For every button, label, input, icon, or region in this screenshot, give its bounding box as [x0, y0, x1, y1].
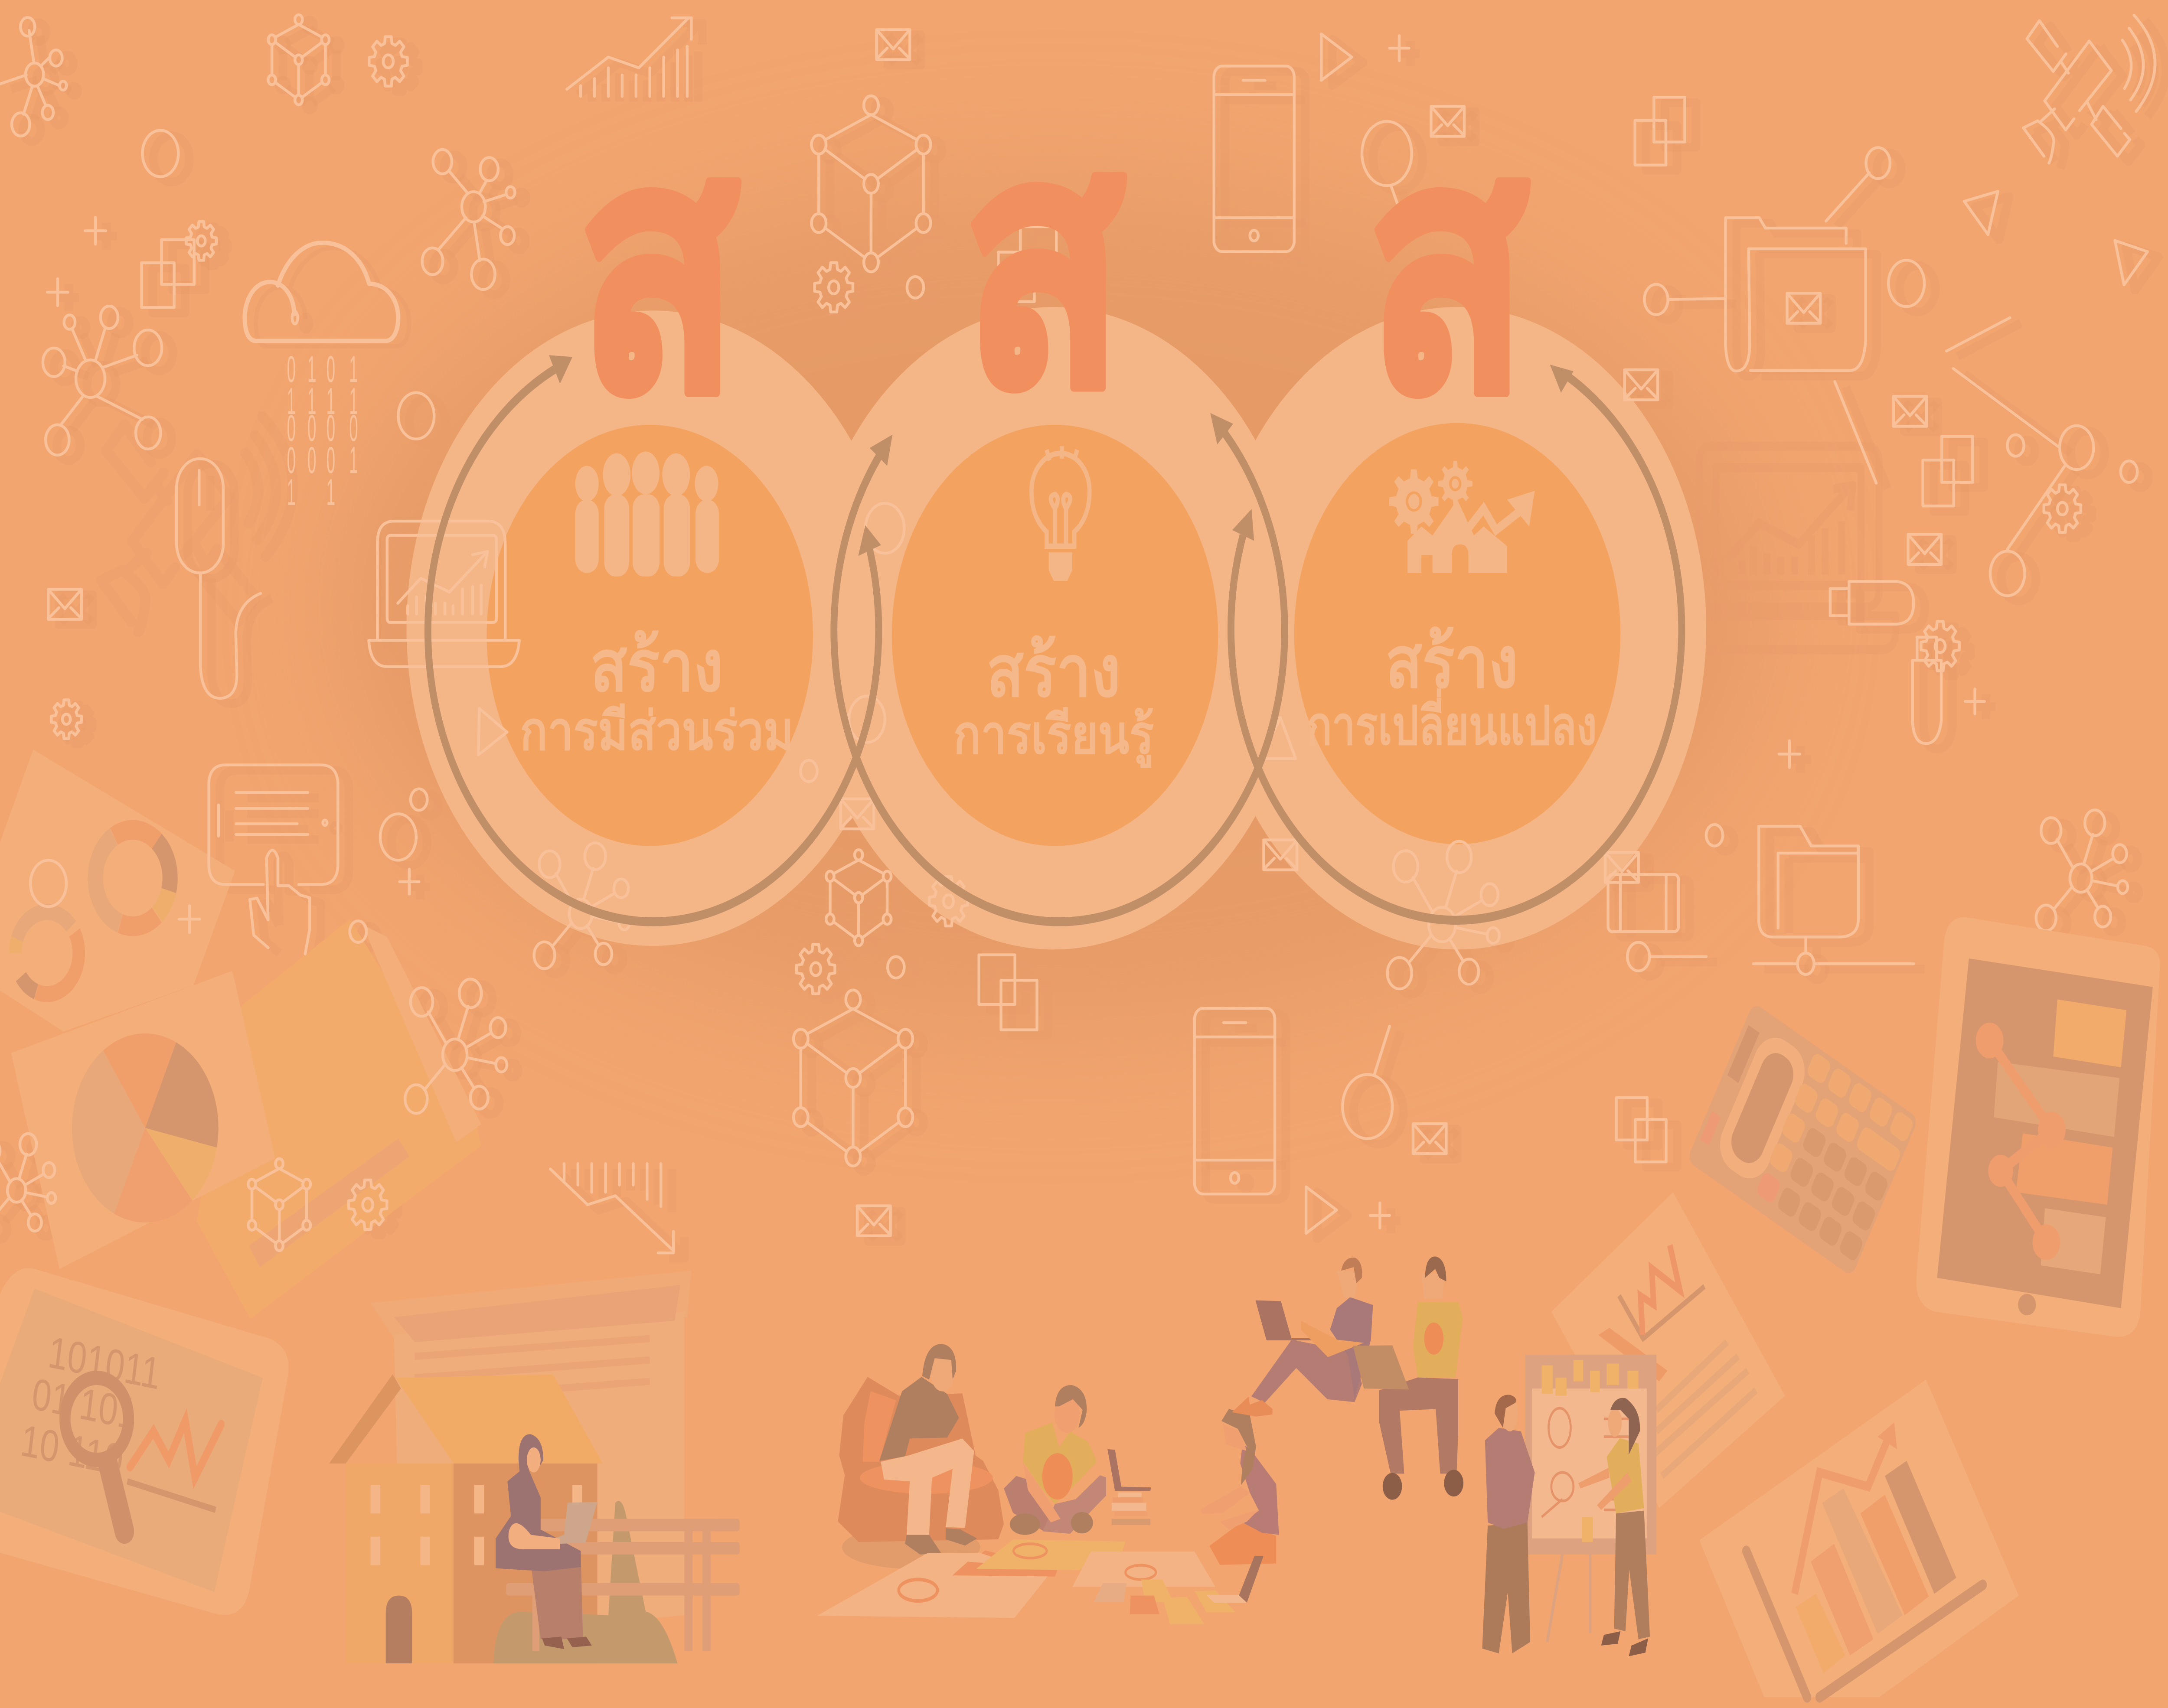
icon: circle left [865, 503, 904, 553]
icon: light bulb [1032, 446, 1090, 578]
trend line [130, 1421, 221, 1478]
icon: envelope [841, 799, 874, 829]
icon: gear [1921, 621, 1959, 671]
disc: middle [892, 425, 1218, 846]
illustration: woman at board [1578, 1398, 1650, 1656]
laptop base [1207, 1595, 1247, 1603]
arrowhead [870, 434, 892, 466]
panel: donut chart paper [0, 750, 235, 1032]
icon: folder network [1753, 826, 1913, 975]
ring: middle [805, 307, 1303, 949]
icon: squares [1635, 97, 1685, 165]
binary digits: 10 110 [18, 1415, 126, 1485]
icon: test tube [1913, 637, 1941, 743]
illustration: laptop behind house [371, 1271, 691, 1642]
label: สร้าง: สร้าง [986, 632, 1121, 711]
chart line with nodes [1976, 1023, 2066, 1260]
label: การมีส่วนร่วม: การมีส่วนร่วม [520, 701, 793, 761]
label: สร้าง: สร้าง [591, 627, 723, 706]
icon: people [575, 452, 719, 577]
icon: envelope [857, 1206, 891, 1236]
label: การเปลี่ยนแปลง: การเปลี่ยนแปลง [1306, 688, 1597, 756]
shoes [905, 1535, 941, 1555]
label: สร้าง: สร้าง [1385, 623, 1518, 703]
icon: envelope [48, 589, 82, 619]
icon: squares [998, 227, 1056, 302]
illustration: woman on bench [496, 1434, 598, 1649]
icon: molecule [0, 1134, 56, 1234]
panel: report paper with zigzag [1551, 1192, 1785, 1508]
panel: pie chart paper [11, 971, 275, 1269]
door [386, 1596, 412, 1663]
icon: molecule top left [0, 17, 66, 136]
icon: envelope [1908, 535, 1941, 564]
icon: phone lower [1195, 1008, 1275, 1194]
donut chart two [3, 897, 91, 1009]
illustration: floor papers [817, 1539, 1235, 1624]
illustration: man in yellow [1353, 1256, 1463, 1500]
icon: triangle [1261, 717, 1296, 759]
big letter three: ส [1368, 81, 1528, 460]
arrowhead [1232, 509, 1254, 541]
ring: left [407, 310, 899, 946]
arrowhead [858, 525, 881, 556]
sticky notes [1541, 1360, 1639, 1542]
icon: small circle [907, 277, 924, 298]
illustration: whiteboard [1525, 1355, 1656, 1642]
icon: envelope [1894, 396, 1926, 427]
icon: magnifier [1342, 1026, 1392, 1139]
big letter one: ส [578, 81, 738, 460]
icon: cube top middle [811, 96, 931, 272]
icon: folder with nodes [1644, 147, 1890, 483]
icon: squares [979, 955, 1037, 1030]
arrowhead [1550, 365, 1574, 393]
binary columns under cloud [287, 349, 358, 514]
arc: middle circle [834, 413, 1285, 922]
icon: gear [929, 877, 968, 926]
icon: usb stick [1830, 581, 1913, 624]
icon: molecule [422, 150, 515, 290]
icon: small circle [1706, 825, 1723, 846]
illustration: bean bag man [838, 1344, 1004, 1569]
icon: gear [186, 222, 216, 261]
diagram marks [1541, 1408, 1629, 1517]
report stripes [1654, 1342, 1756, 1476]
illustration: kneeling woman [1200, 1409, 1279, 1603]
binary digits [18, 1323, 163, 1491]
illustration: boy in yellow [1004, 1385, 1106, 1535]
icon: ghost satellite behind mouse [101, 417, 293, 632]
icon: circle [398, 393, 434, 439]
icon: circle on paper [30, 860, 66, 906]
icon: magnifier [1362, 121, 1412, 232]
icon: falling chart [550, 1164, 673, 1253]
icon: triangle [2115, 241, 2148, 285]
icon: small circle [888, 957, 904, 978]
icon: gear [815, 263, 853, 312]
disc: left [486, 425, 813, 846]
icon: squares [142, 240, 194, 307]
icon: cloud [245, 243, 398, 341]
icon: triangle [1321, 34, 1352, 80]
icon: envelope [1605, 852, 1639, 882]
icon: molecule [2036, 810, 2128, 931]
donut chart one [80, 810, 185, 946]
binary digits: 101011 [46, 1327, 163, 1399]
arrowhead [1210, 413, 1233, 444]
icon: cube [793, 990, 913, 1166]
icon: rising chart [567, 18, 691, 96]
icon: gears, houses and growth arrow [1388, 460, 1535, 573]
icon: squares [1923, 437, 1972, 506]
head [931, 1356, 954, 1392]
axes [1746, 1551, 1983, 1697]
ring: right [1208, 307, 1706, 949]
illustration: hill [493, 1501, 677, 1663]
icon: envelope [1264, 840, 1297, 870]
illustration: man at board [1482, 1395, 1535, 1653]
calculator keys [1756, 1052, 1915, 1263]
icon: cube [826, 850, 891, 946]
arc: left circle [428, 355, 881, 922]
icon: plus [47, 279, 68, 306]
icon: plus [1965, 689, 1985, 714]
icon: small circle [800, 760, 817, 782]
icon: gear [51, 700, 82, 739]
disc: right [1294, 423, 1620, 844]
magnifier [65, 1378, 129, 1531]
icon: envelope [1413, 1124, 1446, 1154]
icon: circle [1888, 260, 1924, 306]
binary columns under cloud: 0101 [287, 349, 358, 391]
icon: envelope [1431, 106, 1464, 137]
illustration: house [329, 1374, 603, 1663]
background shadow behind the circles [332, 179, 1770, 1035]
icon: cube [248, 1159, 310, 1251]
windows [371, 1485, 582, 1565]
label: การเรียนรู้: การเรียนรู้ [953, 705, 1154, 768]
trousers [881, 1438, 974, 1535]
arc: right circle [1231, 365, 1682, 920]
icon: molecule [1388, 841, 1499, 989]
shirt [879, 1377, 959, 1461]
arrowhead [549, 355, 572, 384]
illustration: book stack [1107, 1449, 1151, 1525]
icon: gear [2044, 485, 2081, 532]
binary columns under cloud: 0001 [287, 440, 358, 482]
icon: triangle [1306, 1187, 1337, 1233]
panel: calculator [1687, 1002, 1919, 1277]
icon: small circle [350, 921, 366, 942]
panel: tablet with binary data [0, 1268, 289, 1615]
icon: network lines [1946, 318, 2137, 596]
icon: horizontal tablet [1608, 874, 1706, 971]
big letter two: ส [964, 75, 1124, 454]
growth arrow [1795, 1437, 1889, 1594]
panel: bar chart paper [1699, 1379, 2019, 1697]
laptop screen [1239, 1556, 1264, 1603]
icon: plus [1390, 36, 1409, 61]
icon: squares [1616, 1098, 1666, 1162]
icon: circles [380, 814, 416, 860]
panel: tablet with chart [1916, 917, 2160, 1337]
binary digits: 01 101 [29, 1369, 140, 1439]
icon: envelope [1625, 370, 1658, 400]
panel: ghost laptop right [1690, 446, 1896, 650]
icon: molecule [405, 979, 507, 1113]
icon: plus [400, 869, 419, 894]
binary columns under cloud: 1111 [287, 381, 358, 423]
illustration: bench [506, 1519, 740, 1651]
binary columns under cloud: 11 [287, 472, 335, 514]
pie chart [72, 1033, 219, 1222]
icon: small circle [411, 789, 427, 810]
sticky notes [1094, 1580, 1235, 1624]
icon: plus [85, 217, 106, 244]
heading: left circle [520, 627, 793, 761]
icon: triangle [478, 708, 507, 755]
icon: molecule [534, 843, 630, 969]
illustration: man with laptop [1232, 1258, 1373, 1417]
icon: mouse [176, 459, 261, 698]
icon: gear [349, 1180, 387, 1229]
panel: yellow folder [196, 919, 481, 1319]
heading: right circle [1306, 623, 1597, 756]
icon: circle [849, 696, 885, 743]
icon: plus [179, 906, 200, 932]
icon: plus [1370, 1203, 1390, 1228]
icon: satellite [2023, 15, 2155, 163]
icon: triangle [1964, 191, 1998, 235]
icon: envelope top [877, 29, 910, 60]
icon: phone top [1214, 66, 1294, 252]
icon: plus [1779, 741, 1800, 767]
icon: molecule large [43, 306, 162, 455]
bean bag [842, 1526, 980, 1569]
icon: touch tablet [209, 765, 338, 954]
binary columns under cloud: 0000 [287, 407, 358, 449]
icon: cube network top [268, 15, 329, 105]
icon: gear top [369, 37, 408, 86]
line icons layer [0, 15, 2155, 1253]
icon: gear [797, 945, 835, 994]
icon: laptop [369, 521, 519, 667]
icon: circle [142, 130, 178, 177]
heading: middle circle [953, 632, 1154, 768]
